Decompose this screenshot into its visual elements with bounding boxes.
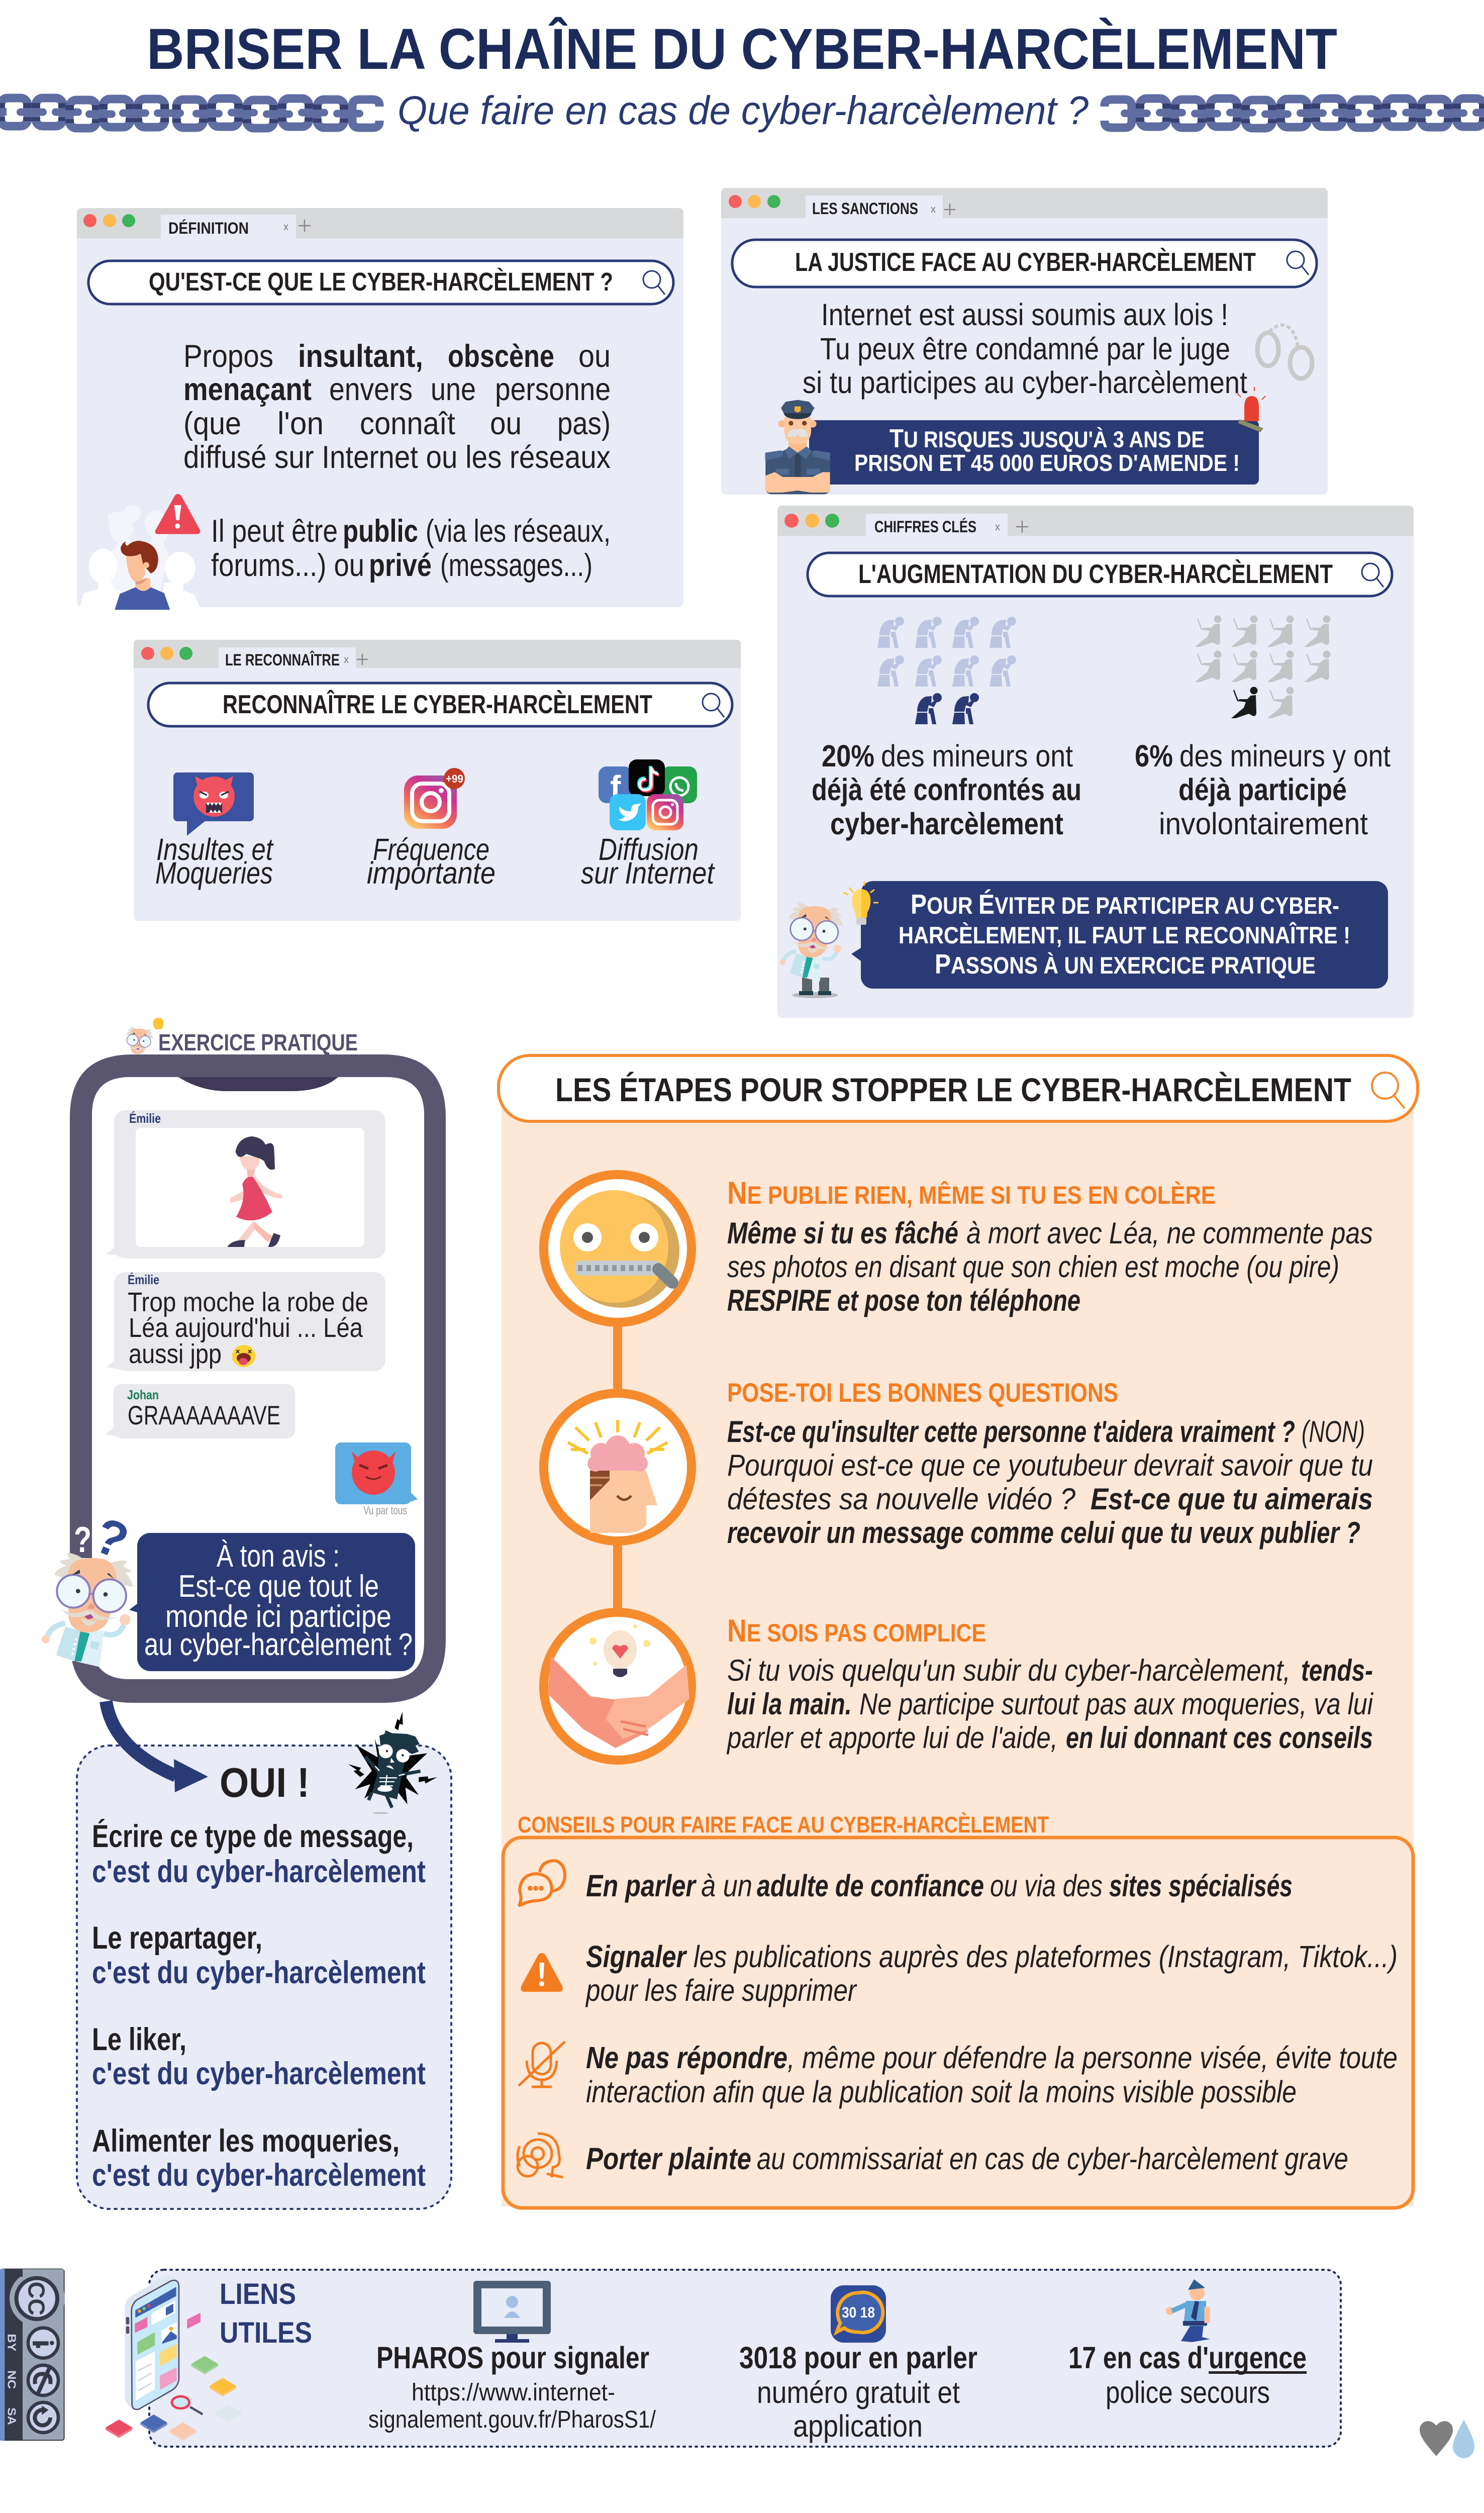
tab label: LES SANCTIONS — [812, 200, 918, 218]
definition text: l'on — [277, 406, 324, 441]
link: 3018 — [739, 2341, 977, 2443]
advice heading: CONSEILS POUR FAIRE FACE AU CYBER-HARCÈLEMENT — [518, 1812, 1049, 1838]
definition text: ou — [490, 406, 522, 441]
search bar — [148, 683, 732, 726]
icon: social networks — [599, 759, 697, 830]
advice 2 text: pour les faire supprimer — [585, 1973, 857, 2007]
penalty callout — [809, 420, 1259, 485]
advice 4 text: Porter plainte — [586, 2142, 751, 2176]
link: 17: urgence — [1209, 2341, 1307, 2375]
panel heading: L'AUGMENTATION DU CYBER-HARCÈLEMENT — [858, 559, 1333, 589]
pictogram: 2 of 10 minors — [877, 617, 1016, 724]
panel heading: LES ÉTAPES POUR STOPPER LE CYBER-HARCÈLEMENT — [555, 1071, 1351, 1108]
label: diffusion: sur Internet — [581, 856, 716, 890]
chain right — [1105, 99, 1484, 128]
seen label: Vu par tous — [363, 1504, 407, 1517]
list: what counts as cyber-harassment: Alimenter les moqueries, — [92, 2123, 400, 2159]
advice 2 text — [585, 1940, 1398, 2007]
step 3 text: Si tu vois quelqu'un subir du cyber-harcèlement, — [727, 1654, 1291, 1687]
step 3 text: en lui donnant ces conseils — [1066, 1721, 1373, 1755]
definition text: diffusé sur Internet ou les réseaux — [183, 440, 611, 475]
penalty callout: TU RISQUES JUSQU'À 3 ANS DE — [889, 424, 1205, 453]
character: questioning professor: ? — [86, 1507, 136, 1570]
icon: warning — [521, 1953, 563, 1992]
step 2 text — [727, 1378, 1373, 1550]
link: 17 — [1068, 2341, 1307, 2409]
panel: chiffres clés: x — [995, 522, 1000, 533]
message: insult: Trop moche la robe de — [128, 1287, 368, 1317]
heading: exercice pratique — [126, 1018, 358, 1055]
licence badge: NC — [5, 2370, 18, 2389]
message: Johan: GRAAAAAAAVE — [128, 1401, 280, 1430]
callout box: POUR ÉVITER DE PARTICIPER AU CYBER- — [911, 889, 1339, 920]
stat: 20%: des mineurs ont — [881, 739, 1073, 773]
character: questioning professor: ? — [74, 1520, 91, 1560]
step 1 text: Même si tu es fâché — [727, 1216, 958, 1250]
link: 17: 17 en cas d' — [1068, 2341, 1209, 2375]
link: pharos: signalement.gouv.fr/PharosS1/ — [368, 2406, 656, 2433]
illustration: girl in red dress — [227, 1136, 282, 1247]
step 2 text: détestes sa nouvelle vidéo ? — [727, 1482, 1076, 1516]
step 3 text: parler et apporte lui de l'aide, — [726, 1721, 1058, 1755]
panel: sanctions: x — [931, 204, 936, 215]
public / private text: (messages...) — [440, 548, 592, 583]
icon: running police officer — [1166, 2279, 1210, 2342]
subtitle: Que faire en cas de cyber-harcèlement ? — [398, 88, 1089, 133]
advice 1 text: adulte de confiance — [757, 1869, 984, 1903]
message: insult: Émilie — [128, 1272, 159, 1287]
step 3 text: tends- — [1301, 1654, 1373, 1687]
advice 1 text: sites spécialisés — [1109, 1869, 1293, 1903]
icon: mocking emoji — [232, 1345, 255, 1367]
arrow to answer — [106, 1701, 208, 1792]
panel: reconnaître — [134, 640, 741, 921]
message: Johan — [106, 1384, 295, 1438]
advice 3 text: interaction afin que la publication soit la moins visible possible — [586, 2075, 1297, 2109]
definition text: (que — [183, 406, 241, 441]
character: professor with light bulb — [780, 882, 878, 998]
tab label: CHIFFRES CLÉS — [874, 518, 976, 536]
advice 4 text — [586, 2142, 1348, 2176]
advice box — [503, 1838, 1413, 2208]
icon: handcuffs — [1257, 325, 1312, 378]
question box — [129, 1533, 415, 1671]
callout box: PASSONS À UN EXERCICE PRATIQUE — [935, 948, 1316, 980]
licence badge: SA — [5, 2407, 18, 2425]
list: what counts as cyber-harassment — [92, 1819, 426, 2193]
heading: liens utiles: UTILES — [220, 2316, 312, 2349]
message: photo from Émilie — [107, 1110, 385, 1259]
icon: monitor — [473, 2281, 551, 2343]
list: what counts as cyber-harassment: c'est du cyber-harcèlement — [92, 1955, 426, 1990]
callout box: HARCÈLEMENT, IL FAUT LE RECONNAÎTRE ! — [899, 922, 1350, 948]
question box: Est-ce que tout le — [178, 1569, 379, 1604]
public / private text — [211, 514, 611, 583]
panel: sanctions — [721, 188, 1328, 495]
link: 17: police secours — [1106, 2375, 1270, 2409]
connectors — [613, 1319, 622, 1618]
heading: liens utiles: LIENS — [220, 2278, 296, 2310]
step 2 text: Pourquoi est-ce que ce youtubeur devrait savoir que tu — [727, 1448, 1373, 1482]
advice 1 text — [586, 1869, 1293, 1903]
icon: devil in speech bubble — [173, 772, 254, 836]
link: pharos — [368, 2341, 656, 2433]
tab label: LE RECONNAÎTRE — [225, 651, 340, 669]
step 2 text: POSE-TOI LES BONNES QUESTIONS — [727, 1378, 1118, 1408]
step 2 text: Est-ce que tu aimerais — [1091, 1482, 1373, 1516]
icon: handshake with bulb — [544, 1612, 691, 1760]
label: fréquence: importante — [367, 856, 496, 890]
panel heading: LA JUSTICE FACE AU CYBER-HARCÈLEMENT — [795, 248, 1256, 277]
definition text: pas) — [557, 406, 611, 441]
sanctions text — [803, 298, 1247, 400]
icon: heart and drop — [1420, 2420, 1474, 2458]
pictogram: 1 of 10 participants — [1195, 615, 1331, 718]
stat: 20% — [812, 739, 1081, 841]
stat: 20%: cyber-harcèlement — [830, 807, 1063, 841]
icon: zipped-mouth emoji — [544, 1175, 691, 1322]
advice 1 text: En parler — [586, 1869, 697, 1903]
icon: complaint — [518, 2134, 563, 2177]
phone frame — [70, 1054, 446, 1703]
illustration: person among crowd with warning — [79, 494, 200, 610]
search bar — [732, 240, 1317, 287]
label: fréquence: Fréquence — [373, 832, 489, 866]
step 3 text: NE SOIS PAS COMPLICE — [727, 1613, 986, 1649]
message: insult — [107, 1272, 385, 1371]
character: electrocuted skeleton — [348, 1711, 437, 1814]
panel: chiffres clés — [777, 506, 1414, 1018]
sanctions text: si tu participes au cyber-harcèlement — [803, 365, 1247, 400]
definition text: obscène — [448, 339, 554, 374]
definition text: envers — [329, 372, 413, 407]
advice 4 text: au commissariat en cas de cyber-harcèlement grave — [757, 2142, 1348, 2176]
step 1 text: à mort avec Léa, ne commente pas — [966, 1216, 1373, 1250]
panel: étapes — [499, 1055, 1418, 2208]
step 2 text: Est-ce qu'insulter cette personne t'aidera vraiment ? — [727, 1415, 1295, 1448]
title: BRISER LA CHAÎNE DU CYBER-HARCÈLEMENT — [147, 17, 1337, 81]
step 3 text: Ne participe surtout pas aux moqueries, va lui — [859, 1687, 1373, 1721]
licence badge: CC — [24, 2282, 50, 2315]
icon: instagram notifications: +99 — [446, 772, 463, 785]
label: insultes: Moqueries — [155, 856, 273, 890]
step 1 text: ses photos en disant que son chien est moche (ou pire) — [727, 1250, 1339, 1284]
stat: 20%: 20% — [822, 739, 874, 773]
icon: social networks: f — [610, 769, 621, 805]
icon: head with brain — [544, 1393, 691, 1541]
penalty callout: PRISON ET 45 000 EUROS D'AMENDE ! — [854, 450, 1240, 476]
public / private text: forums...) ou — [211, 548, 364, 583]
public / private text: Il peut être — [211, 514, 338, 549]
stat: 6%: des mineurs y ont — [1179, 739, 1391, 773]
definition text: Propos — [183, 339, 273, 374]
sanctions text: Tu peux être condamné par le juge — [820, 332, 1230, 366]
message: devil emoji reply — [335, 1442, 418, 1504]
link: pharos: https://www.internet- — [412, 2379, 615, 2406]
definition text: menaçant — [183, 372, 312, 407]
question box: monde ici participe — [165, 1599, 391, 1634]
stat: 6% — [1135, 739, 1391, 841]
icon: police officer — [765, 400, 830, 494]
question box: au cyber-harcèlement ? — [144, 1627, 413, 1662]
advice 3 text: Ne pas répondre — [586, 2041, 787, 2075]
panel: définition — [77, 208, 683, 610]
stat: 20%: déjà été confrontés au — [812, 772, 1081, 807]
tab label: DÉFINITION — [168, 219, 249, 237]
definition text — [183, 339, 611, 475]
panel heading: QU'EST-CE QUE LE CYBER-HARCÈLEMENT ? — [149, 267, 613, 296]
label: fréquence — [367, 832, 496, 890]
public / private text: public — [343, 514, 418, 549]
label: insultes — [155, 832, 274, 890]
heading: exercice pratique: EXERCICE PRATIQUE — [158, 1029, 358, 1055]
list: what counts as cyber-harassment: c'est du cyber-harcèlement — [92, 2158, 426, 2193]
definition text: personne — [495, 372, 611, 407]
heading: liens utiles — [220, 2278, 312, 2349]
link: 3018: 3018 pour en parler — [739, 2341, 977, 2375]
public / private text: (via les réseaux, — [426, 514, 611, 549]
step 3 text — [726, 1613, 1373, 1755]
panel: reconnaître: x — [344, 654, 349, 665]
stat: 6%: déjà participé — [1178, 772, 1347, 807]
label: diffusion: Diffusion — [599, 832, 699, 866]
link: 3018: application — [793, 2409, 923, 2443]
step 1 text — [727, 1176, 1373, 1317]
list: what counts as cyber-harassment: Le repartager, — [92, 1920, 262, 1956]
panel: réponse oui — [77, 1701, 451, 2209]
definition text: ou — [578, 339, 611, 374]
advice 3 text — [586, 2041, 1398, 2109]
icon: siren — [1237, 387, 1265, 432]
panel: définition: x — [283, 222, 288, 233]
link: pharos: PHAROS pour signaler — [376, 2341, 649, 2375]
licence badge: BY — [5, 2334, 18, 2352]
definition text: une — [431, 372, 476, 407]
step 2 text: (NON) — [1302, 1415, 1365, 1448]
panel heading: RECONNAÎTRE LE CYBER-HARCÈLEMENT — [223, 690, 652, 719]
list: what counts as cyber-harassment: Écrire ce type de message, — [92, 1819, 414, 1854]
icon: chat — [519, 1861, 565, 1906]
public / private text: privé — [369, 548, 432, 583]
label: diffusion — [581, 832, 716, 890]
icon: instagram notifications — [404, 768, 465, 829]
icon: 3018 — [831, 2285, 886, 2343]
advice 1 text: à un — [701, 1869, 752, 1903]
icon: 3018: 30 18 — [842, 2304, 875, 2321]
list: what counts as cyber-harassment: c'est du cyber-harcèlement — [92, 2056, 426, 2091]
search bar — [499, 1055, 1418, 1121]
character: questioning professor — [42, 1507, 136, 1667]
message: insult: aussi jpp — [129, 1339, 222, 1369]
link: 3018: numéro gratuit et — [757, 2375, 960, 2409]
step 1 text: RESPIRE et pose ton téléphone — [727, 1284, 1080, 1317]
callout box — [851, 881, 1388, 989]
question box: À ton avis : — [217, 1539, 340, 1574]
licence badge — [0, 2269, 65, 2441]
search bar — [88, 261, 673, 304]
label: insultes: Insultes et — [156, 832, 274, 866]
stat: 6%: involontairement — [1159, 807, 1368, 841]
message: Johan: Johan — [127, 1387, 159, 1402]
illustration: smartphone and app tiles — [106, 2276, 242, 2441]
definition text: connaît — [360, 406, 455, 441]
sanctions text: Internet est aussi soumis aux lois ! — [821, 298, 1228, 332]
step 1 text: NE PUBLIE RIEN, MÊME SI TU ES EN COLÈRE — [727, 1176, 1216, 1211]
advice 1 text: ou via des — [990, 1869, 1103, 1903]
advice 2 text: Signaler — [586, 1940, 687, 1974]
step 3 text: lui la main. — [727, 1687, 852, 1721]
list: what counts as cyber-harassment: c'est du cyber-harcèlement — [92, 1854, 426, 1889]
message: insult: Léa aujourd'hui ... Léa — [129, 1313, 363, 1343]
stat: 6%: 6% — [1135, 739, 1173, 773]
answer heading: OUI ! — [220, 1759, 310, 1806]
message: photo from Émilie: Émilie — [129, 1111, 161, 1126]
icon: muted microphone — [519, 2042, 565, 2087]
search bar — [808, 553, 1392, 596]
definition text: insultant, — [298, 339, 423, 374]
list: what counts as cyber-harassment: Le liker, — [92, 2022, 186, 2057]
advice 3 text: , même pour défendre la personne visée, évite toute — [787, 2041, 1398, 2075]
chain left — [0, 98, 379, 128]
panel: liens utiles — [106, 2270, 1341, 2447]
